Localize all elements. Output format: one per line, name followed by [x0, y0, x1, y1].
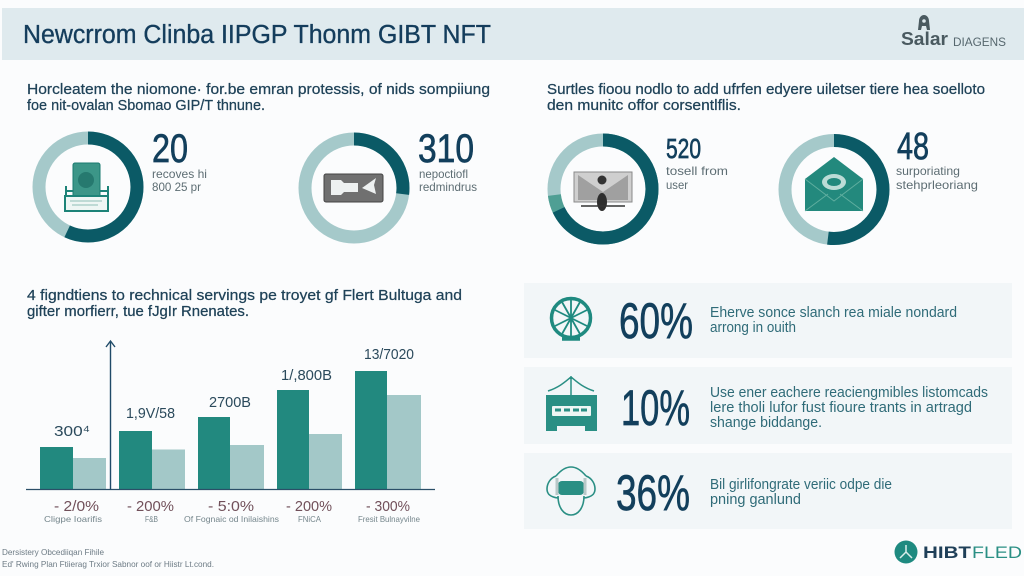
- title: Newcrrom Clinba IIPGP Thonm GIBT NFT: [23, 21, 491, 49]
- description: [710, 385, 988, 431]
- header band: [2, 8, 1024, 60]
- bars: group 5: [355, 371, 421, 490]
- stat 3: donut with user icon: [554, 133, 728, 238]
- percent labels: - 200%: [127, 498, 174, 515]
- caption: [419, 167, 477, 194]
- logo: HIBTFLED: FLED: [972, 543, 1022, 562]
- icon: document tray: [65, 163, 108, 211]
- caption: [896, 164, 978, 192]
- icon: globe: [552, 298, 590, 339]
- category labels: F&B: [145, 514, 158, 524]
- caption: nepoctiofl: [419, 167, 468, 181]
- panel: 60%: [524, 283, 1012, 358]
- description: [710, 305, 957, 336]
- percent labels: - 5:0%: [208, 498, 254, 515]
- caption: [666, 164, 728, 192]
- category labels: Fresit Bulnayvilne: [358, 514, 420, 524]
- bar value labels: 1,9V/58: [126, 405, 175, 422]
- logo: HIBTFLED: [894, 540, 1022, 564]
- icon: user at screen: [574, 172, 632, 211]
- description: pning ganlund: [710, 492, 801, 508]
- section heading: bar chart: gifter morfierr, tue fJgIr Rnenates.: [27, 303, 249, 320]
- bars: group 3: [198, 417, 264, 490]
- bars: group 1: [40, 447, 106, 490]
- percent labels: - 2/0%: [54, 498, 99, 515]
- bars: group 4: [277, 390, 342, 490]
- bar value labels: [54, 346, 414, 440]
- icon: face with headset: [547, 467, 595, 515]
- percent labels: [54, 498, 410, 515]
- section heading: bar chart: [27, 287, 462, 320]
- caption: redmindrus: [419, 180, 477, 194]
- section heading: top left: foe nit-ovalan Sbomao GIP/T thnune.: [27, 97, 265, 114]
- caption: 800 25 pr: [152, 180, 201, 194]
- description: Use ener eachere reaciengmibles listomcads: [710, 385, 988, 401]
- panel: 36%: [524, 453, 1012, 529]
- logo: Salar Diagens: DIAGENS: [953, 37, 1006, 49]
- icon: envelope: [805, 157, 863, 211]
- section heading: top left: [27, 81, 490, 114]
- value: 48: [897, 126, 929, 168]
- section heading: top right: Surtles fioou nodlo to add ufrfen edyere uiletser tiere hea soelloto: [547, 81, 985, 98]
- footer source note: [2, 547, 214, 569]
- section heading: top right: den munitc offor corsentlflis.: [547, 97, 741, 114]
- icon: market stall: [546, 376, 597, 431]
- value: 10%: [621, 380, 690, 436]
- category labels: [44, 514, 420, 524]
- caption: user: [666, 178, 688, 192]
- value: 36%: [616, 465, 690, 521]
- category labels: FNiCA: [298, 514, 321, 524]
- description: shange biddange.: [710, 415, 822, 431]
- bar value labels: 1/,800B: [281, 367, 332, 384]
- logo: Salar Diagens: Salar: [901, 28, 948, 49]
- footer source note: Dersistery Obcediiqan Fihile: [2, 547, 104, 557]
- percent labels: - 200%: [286, 498, 332, 515]
- description: Eherve sonce slanch rea miale nondard: [710, 305, 957, 321]
- category labels: Cligpe Ioarifis: [44, 514, 102, 524]
- stat 1: donut with document icon: [39, 127, 207, 236]
- bar value labels: 2700B: [209, 394, 251, 411]
- bar value labels: 13/7020: [364, 346, 414, 363]
- caption: recoves hi: [152, 167, 207, 181]
- bars: group 2: [119, 431, 185, 490]
- caption: stehprleoriang: [896, 178, 978, 192]
- panel: 10%: [524, 367, 1012, 444]
- description: arrong in ouith: [710, 320, 796, 336]
- caption: [152, 167, 207, 194]
- footer source note: Ed' Rwing Plan Ftiierag Trxior Sabnor oof or Hiistr Lt.cond.: [2, 559, 214, 569]
- description: lere tholi lufor fust fioure trants in artragd: [710, 400, 972, 416]
- value: 60%: [619, 293, 693, 349]
- bar value labels: 300⁴: [54, 423, 90, 440]
- axes and arrow: [26, 341, 435, 490]
- section heading: bar chart: 4 figndtiens to rechnical servings pe troyet gf Flert Bultuga and: [27, 287, 462, 304]
- description: [710, 477, 892, 508]
- stat 2: donut with key icon: [305, 127, 477, 237]
- caption: surporiating: [896, 164, 960, 178]
- value: 20: [152, 127, 188, 171]
- logo: HIBTFLED: HIBT: [923, 543, 972, 562]
- description: Bil girlifongrate veriic odpe die: [710, 477, 892, 493]
- value: 310: [418, 127, 474, 171]
- bar chart: [26, 341, 435, 524]
- section heading: top left: Horcleatem the niomone· for.be emran protessis, of nids sompiiung: [27, 81, 490, 98]
- category labels: Of Fognaic od Inilaishins: [184, 514, 279, 524]
- icon: key panel: [324, 174, 383, 202]
- section heading: top right: [547, 81, 985, 114]
- caption: tosell from: [666, 164, 728, 178]
- value: 520: [666, 133, 701, 164]
- stat 4: donut with envelope icon: [785, 126, 978, 238]
- logo: Salar Diagens: [901, 15, 1006, 49]
- percent labels: - 300%: [366, 498, 410, 515]
